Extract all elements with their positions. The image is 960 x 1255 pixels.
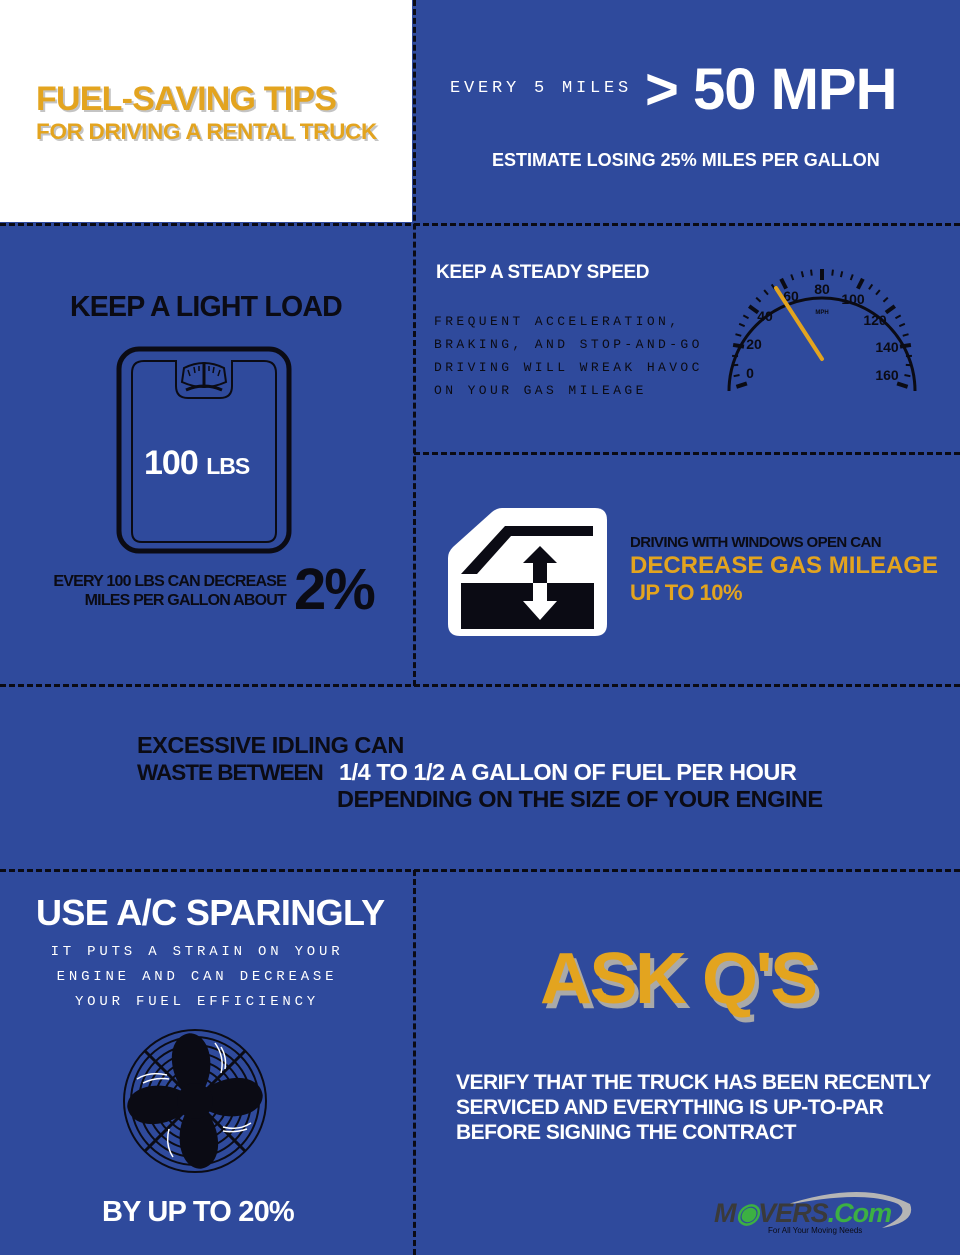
panel: A/C bbox=[36, 892, 385, 1228]
text: SERVICED AND EVERYTHING IS UP-TO-PAR bbox=[456, 1096, 883, 1119]
icon: speedometer bbox=[728, 269, 916, 391]
icon: speedometer: MPH bbox=[815, 310, 829, 316]
text: YOUR FUEL EFFICIENCY bbox=[75, 994, 319, 1010]
text: IT PUTS A STRAIN ON YOUR bbox=[51, 944, 343, 960]
logo bbox=[714, 1192, 912, 1235]
icon: scale bbox=[116, 346, 292, 554]
text: every 100 lbs bbox=[53, 573, 287, 609]
icon: fan bbox=[123, 1029, 267, 1173]
icon: car window bbox=[448, 508, 607, 636]
icon: speedometer: 60 bbox=[783, 288, 799, 304]
icon: speedometer: 120 bbox=[863, 312, 887, 328]
heading: ASK Q'S bbox=[540, 939, 816, 1019]
text: windows: DRIVING WITH WINDOWS OPEN CAN bbox=[630, 534, 881, 551]
panel: windows bbox=[448, 508, 938, 636]
text: DRIVING WILL WREAK HAVOC bbox=[434, 360, 703, 375]
heading: USE A/C SPARINGLY bbox=[36, 892, 385, 933]
text: ENGINE AND CAN DECREASE bbox=[57, 969, 337, 985]
panel: speed over 50: EVERY 5 MILES bbox=[450, 79, 632, 98]
text: BEFORE SIGNING THE CONTRACT bbox=[456, 1121, 796, 1144]
text: every 100 lbs: MILES PER GALLON ABOUT bbox=[85, 592, 286, 609]
panel: windows: DECREASE GAS MILEAGE bbox=[630, 552, 938, 579]
title bbox=[36, 80, 379, 144]
panel: idling bbox=[137, 732, 823, 812]
text bbox=[456, 1071, 931, 1144]
icon: speedometer: 160 bbox=[875, 367, 899, 383]
logo: For All Your Moving Needs bbox=[768, 1226, 862, 1235]
title: FUEL-SAVING TIPS bbox=[36, 80, 336, 118]
heading: KEEP A STEADY SPEED bbox=[436, 262, 649, 283]
title panel bbox=[0, 0, 412, 222]
panel: speed over 50: ESTIMATE LOSING 25% MILES PER GALLON bbox=[492, 150, 880, 170]
panel: light load bbox=[53, 291, 374, 622]
stat 2%: 2% bbox=[294, 557, 374, 622]
panel: speed over 50: > 50 MPH bbox=[645, 57, 896, 122]
panel: windows: UP TO 10% bbox=[630, 580, 742, 605]
panel: idling: WASTE BETWEEN bbox=[137, 760, 323, 785]
text: 100 lbs: 100 LBS bbox=[144, 444, 249, 482]
text bbox=[51, 944, 343, 1010]
panel: ask questions bbox=[456, 939, 931, 1235]
text: ON YOUR GAS MILEAGE bbox=[434, 383, 647, 398]
heading: KEEP A LIGHT LOAD bbox=[70, 291, 342, 323]
panel: steady speed bbox=[434, 262, 916, 398]
icon: speedometer: 0 bbox=[746, 365, 754, 381]
icon: speedometer: 40 bbox=[757, 308, 773, 324]
panel: idling: EXCESSIVE IDLING CAN bbox=[137, 732, 404, 758]
panel: speed over 50 bbox=[450, 57, 896, 170]
icon: speedometer: 80 bbox=[814, 281, 830, 297]
icon: speedometer: 100 bbox=[841, 291, 865, 307]
logo: M◉VERS.Com bbox=[714, 1198, 891, 1228]
text: BRAKING, AND STOP-AND-GO bbox=[434, 337, 703, 352]
text: every 100 lbs: EVERY 100 LBS CAN DECREASE bbox=[53, 573, 286, 590]
stat: by up to 20%: BY UP TO 20% bbox=[102, 1196, 294, 1228]
text: FREQUENT ACCELERATION, bbox=[434, 314, 680, 329]
title: FOR DRIVING A RENTAL TRUCK bbox=[36, 119, 377, 144]
icon: speedometer: 20 bbox=[746, 336, 762, 352]
panel: idling: 1/4 TO 1/2 A GALLON OF FUEL PER HOUR bbox=[339, 759, 796, 785]
text: VERIFY THAT THE TRUCK HAS BEEN RECENTLY bbox=[456, 1071, 931, 1094]
text bbox=[434, 314, 703, 398]
icon: speedometer: 140 bbox=[875, 339, 899, 355]
panel: idling: DEPENDING ON THE SIZE OF YOUR ENGINE bbox=[337, 786, 823, 812]
